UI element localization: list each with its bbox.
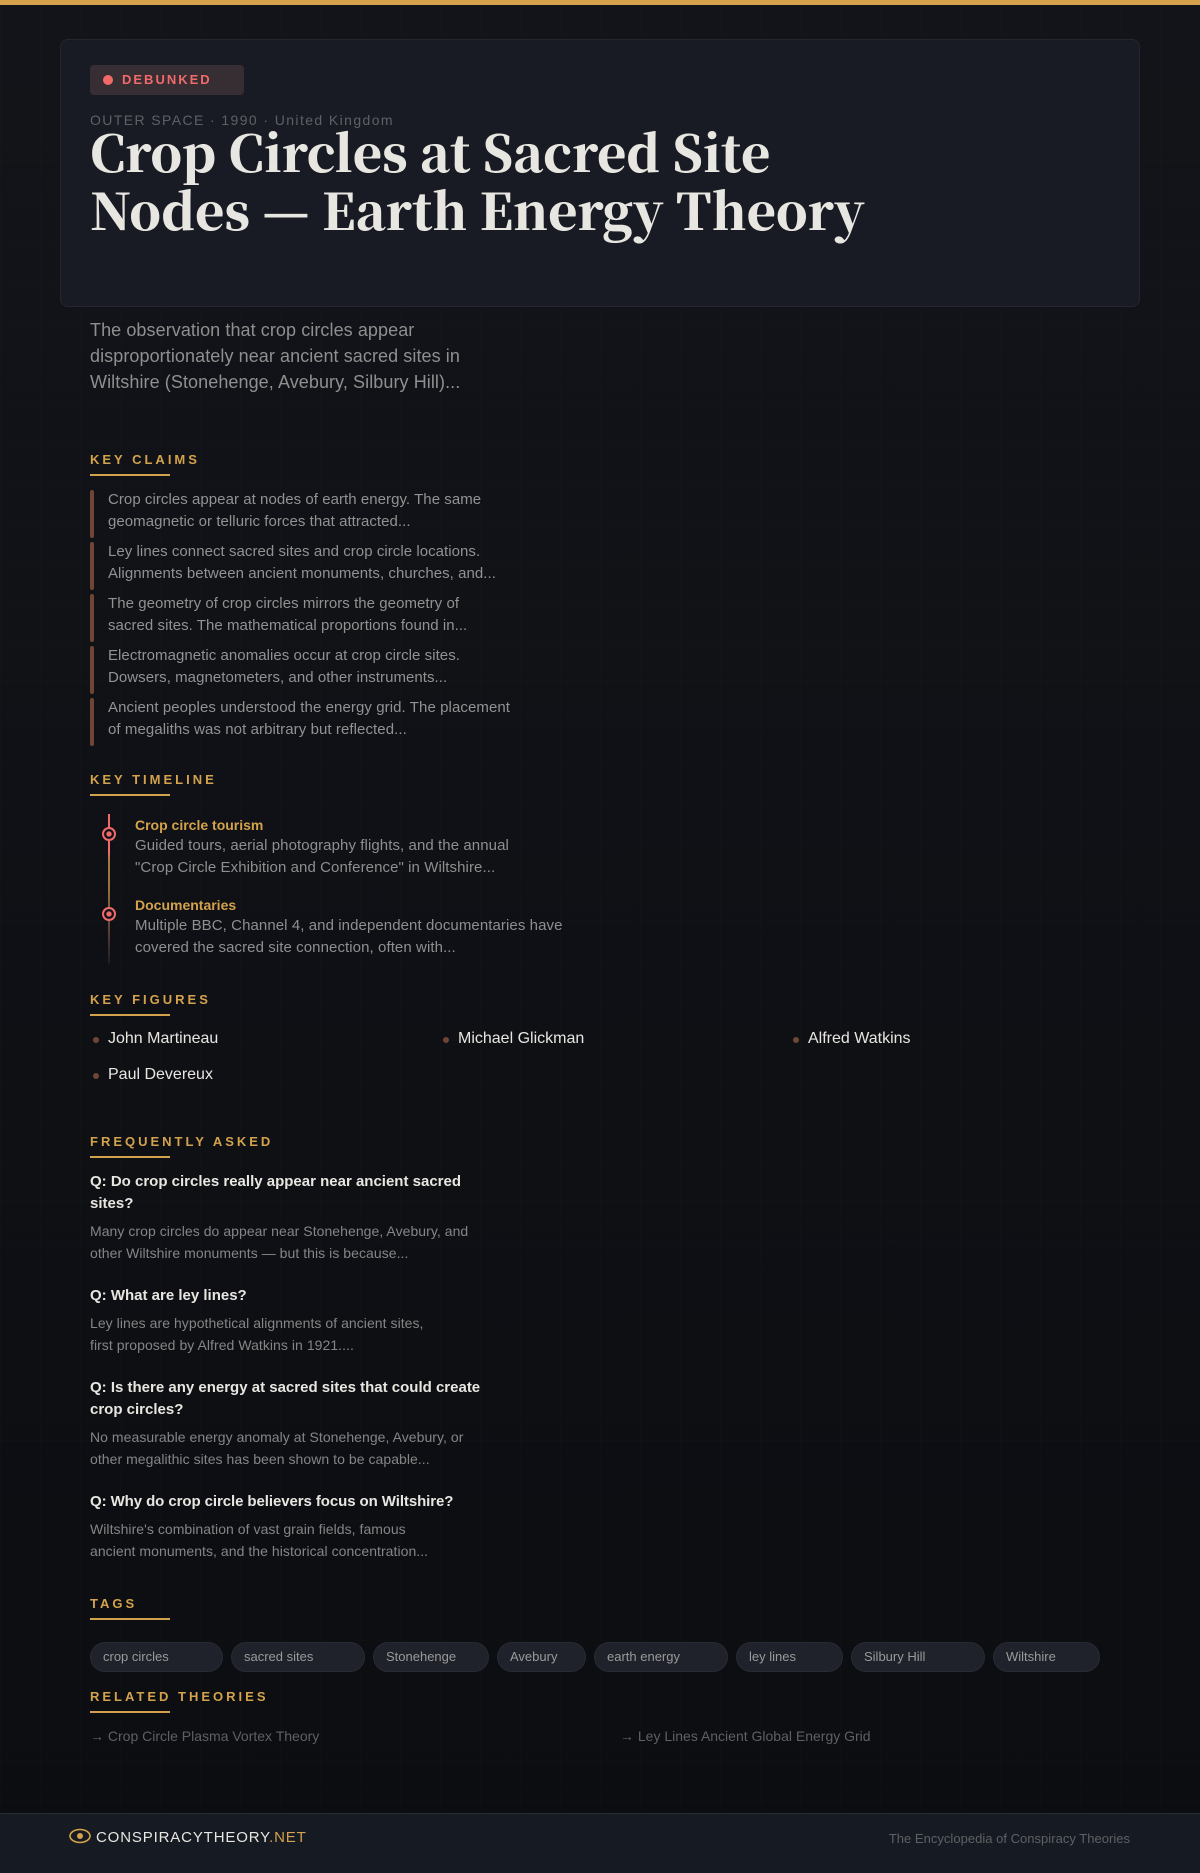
logo wordmark: CONSPIRACYTHEORY.NET [96,1829,307,1846]
title: Nodes — Earth Energy Theory [90,173,865,245]
faq 1: sites? [90,1195,133,1212]
faq 1 [90,1173,468,1261]
tag: Stonehenge [373,1642,489,1672]
tag: sacred sites [231,1642,365,1672]
figure: Alfred Watkins: Alfred Watkins [808,1030,911,1047]
tag: Avebury [497,1642,586,1672]
icon: eye logo [69,1828,91,1844]
claim 4 [90,646,460,694]
tag: sacred sites: sacred sites [244,1649,313,1664]
claim 2: Alignments between ancient monuments, churches, and... [108,565,496,582]
faq 3 [90,1379,480,1467]
claim 3: The geometry of crop circles mirrors the geometry of [108,595,459,612]
claim 2: Ley lines connect sacred sites and crop circle locations. [108,543,480,560]
summary text: Wiltshire (Stonehenge, Avebury, Silbury Hill)... [90,372,460,392]
claim 1: Crop circles appear at nodes of earth energy. The same [108,491,481,508]
heading: key claims: KEY CLAIMS [90,452,200,467]
status badge [90,65,244,95]
summary text [90,320,460,392]
heading: frequently asked: FREQUENTLY ASKED [90,1134,273,1149]
title [90,115,865,245]
top accent bar [0,0,1200,5]
figure: Michael Glickman: Michael Glickman [458,1030,584,1047]
claim 5: of megaliths was not arbitrary but reflected... [108,721,407,738]
faq 2: Q: What are ley lines? [90,1287,247,1304]
tag: crop circles: crop circles [103,1649,169,1664]
claim 5 [90,698,510,746]
tag: ley lines [736,1642,843,1672]
timeline entry 2: Documentaries [135,897,236,913]
tag: crop circles [90,1642,223,1672]
tag: earth energy: earth energy [607,1649,680,1664]
faq 4: Q: Why do crop circle believers focus on Wiltshire? [90,1493,453,1510]
faq 2 [90,1287,424,1353]
tag: Silbury Hill: Silbury Hill [864,1649,925,1664]
timeline node 1 [102,827,116,841]
faq 1: other Wiltshire monuments — but this is because... [90,1245,408,1261]
claim 1 [90,490,481,538]
tag: Silbury Hill [851,1642,985,1672]
tag: Stonehenge: Stonehenge [386,1649,456,1664]
faq 3: No measurable energy anomaly at Stonehenge, Avebury, or [90,1429,463,1445]
faq 3: crop circles? [90,1401,183,1418]
footer tagline: The Encyclopedia of Conspiracy Theories [889,1831,1130,1846]
heading: related theories: RELATED THEORIES [90,1689,268,1704]
claim 5: Ancient peoples understood the energy grid. The placement [108,699,510,716]
timeline entry 1: Crop circle tourism [135,817,263,833]
heading: tags: TAGS [90,1596,137,1611]
faq 4: Wiltshire's combination of vast grain fields, famous [90,1521,406,1537]
faq 3: other megalithic sites has been shown to be capable... [90,1451,430,1467]
faq 4 [90,1493,453,1559]
claim 1: geomagnetic or telluric forces that attracted... [108,513,411,530]
figure: John Martineau: John Martineau [108,1030,218,1047]
faq 1: Q: Do crop circles really appear near ancient sacred [90,1173,461,1190]
footer [0,1813,1200,1873]
faq 2: first proposed by Alfred Watkins in 1921.... [90,1337,354,1353]
panel: hero header [60,39,1140,307]
claim 4: Dowsers, magnetometers, and other instruments... [108,669,447,686]
faq 2: Ley lines are hypothetical alignments of ancient sites, [90,1315,424,1331]
heading: key timeline: KEY TIMELINE [90,772,217,787]
claim 3: sacred sites. The mathematical proportions found in... [108,617,467,634]
tag: Wiltshire [993,1642,1100,1672]
related link 1: → Crop Circle Plasma Vortex Theory [90,1728,319,1744]
timeline line [108,814,110,964]
timeline entry 2 [135,897,562,956]
claim 3 [90,594,467,642]
claim 2 [90,542,496,590]
tag: ley lines: ley lines [749,1649,796,1664]
tag: Avebury: Avebury [510,1649,557,1664]
faq 4: ancient monuments, and the historical concentration... [90,1543,428,1559]
timeline entry 1: Guided tours, aerial photography flights, and the annual [135,837,509,854]
summary text: The observation that crop circles appear [90,320,414,340]
icon: status dot [103,75,113,85]
timeline node 2 [102,907,116,921]
faq 3: Q: Is there any energy at sacred sites that could create [90,1379,480,1396]
timeline entry 1 [135,817,509,876]
related link 2: → Ley Lines Ancient Global Energy Grid [620,1728,871,1744]
tag: Wiltshire: Wiltshire [1006,1649,1056,1664]
heading: key figures: KEY FIGURES [90,992,211,1007]
timeline entry 1: "Crop Circle Exhibition and Conference" in Wiltshire... [135,859,495,876]
timeline entry 2: covered the sacred site connection, often with... [135,939,456,956]
figure: Paul Devereux: Paul Devereux [108,1066,213,1083]
title: Crop Circles at Sacred Site [90,115,770,187]
tag: earth energy [594,1642,728,1672]
faq 1: Many crop circles do appear near Stonehenge, Avebury, and [90,1223,468,1239]
timeline entry 2: Multiple BBC, Channel 4, and independent documentaries have [135,917,562,934]
claim 4: Electromagnetic anomalies occur at crop circle sites. [108,647,460,664]
badge label: DEBUNKED [122,72,212,87]
meta line: OUTER SPACE · 1990 · United Kingdom [90,112,394,128]
summary text: disproportionately near ancient sacred sites in [90,346,460,366]
